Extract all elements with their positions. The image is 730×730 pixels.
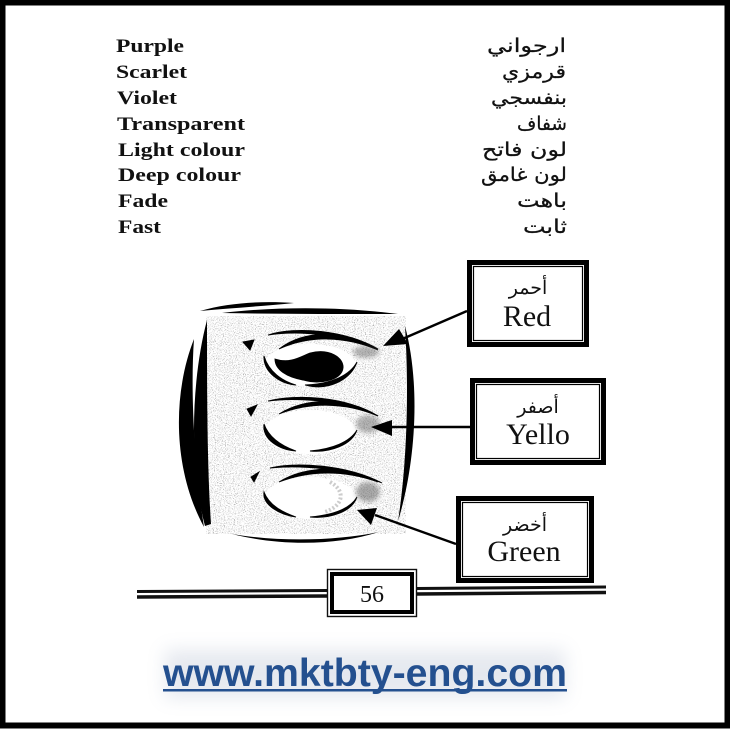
- vocabulary list: English terms: Fast: [118, 217, 162, 238]
- vocabulary list: Arabic terms: شفاف: [517, 113, 567, 135]
- vocabulary list: English terms: Light colour: [118, 140, 246, 161]
- vocabulary list: Arabic terms: [481, 35, 567, 238]
- red lamp: [243, 330, 379, 387]
- arrow: Green box to green lamp: [357, 508, 456, 544]
- box: Red label: Red: [503, 300, 551, 333]
- page number rule: [137, 587, 606, 597]
- vocabulary list: Arabic terms: ارجواني: [487, 35, 566, 57]
- green lamp: [251, 465, 382, 519]
- box: Red label: [470, 262, 586, 344]
- box: Yellow label: [472, 380, 604, 462]
- vocabulary list: English terms: Deep colour: [118, 165, 242, 186]
- vocabulary list: English terms: Purple: [116, 36, 184, 57]
- box: Green label: أخضر: [502, 512, 547, 536]
- vocabulary list: English terms: Violet: [117, 88, 178, 109]
- arrow: Yellow box to yellow lamp: [371, 420, 470, 436]
- page number box: 56: [360, 582, 384, 608]
- website url: www.mktbty-eng.com: [162, 652, 567, 695]
- page number box: [328, 570, 416, 616]
- box: Yellow label: Yello: [506, 418, 570, 451]
- vocabulary list: Arabic terms: ثابت: [523, 216, 567, 238]
- traffic light illustration: [179, 302, 414, 543]
- vocabulary list: Arabic terms: لون فاتح: [482, 139, 567, 161]
- speckled housing: [206, 316, 406, 534]
- box: Green label: Green: [487, 535, 561, 568]
- yellow lamp: [247, 397, 380, 454]
- arrow: Red box to red lamp: [383, 311, 467, 346]
- vocabulary list: Arabic terms: بنفسجي: [491, 87, 567, 109]
- vocabulary list: English terms: Scarlet: [116, 62, 188, 83]
- vocabulary list: English terms: [116, 36, 246, 238]
- box: Yellow label: أصفر: [516, 394, 559, 418]
- vocabulary list: Arabic terms: قرمزي: [502, 61, 566, 83]
- vocabulary list: Arabic terms: باهت: [517, 190, 567, 212]
- vocabulary list: Arabic terms: لون غامق: [481, 164, 567, 186]
- box: Red label: أحمر: [508, 275, 547, 299]
- box: Green label: [458, 498, 592, 580]
- vocabulary list: English terms: Transparent: [117, 114, 246, 135]
- vocabulary list: English terms: Fade: [118, 191, 168, 212]
- housing outline strokes: [179, 302, 414, 543]
